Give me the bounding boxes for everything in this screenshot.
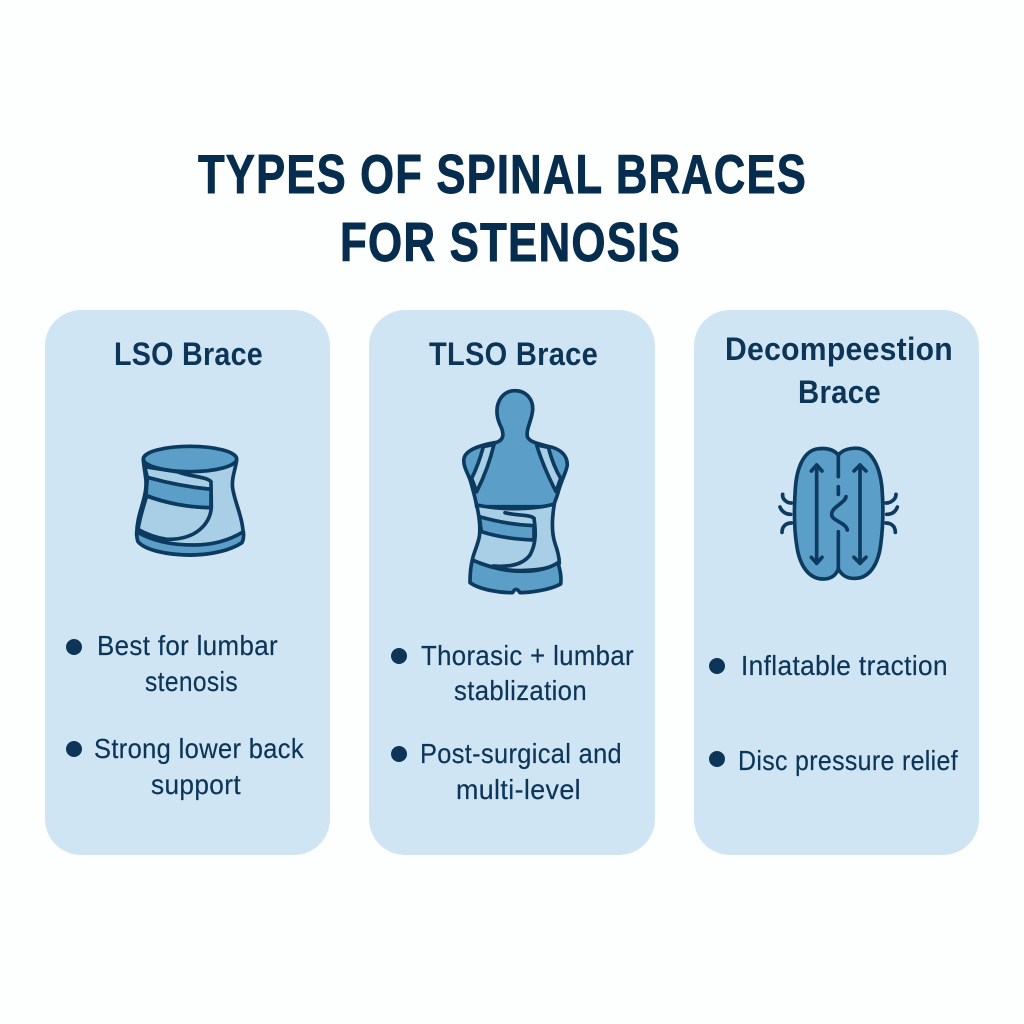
bullet list: LSO brace: support bbox=[151, 769, 241, 800]
panel: TLSO brace bbox=[369, 310, 655, 855]
bullet list: decompression brace: Inflatable traction bbox=[741, 650, 948, 681]
bullet list: LSO brace: Strong lower back bbox=[94, 733, 305, 764]
heading: TLSO brace: TLSO Brace bbox=[429, 336, 598, 372]
heading: decompression brace: Brace bbox=[798, 374, 881, 410]
heading: LSO brace: LSO Brace bbox=[114, 336, 263, 372]
bullet list: LSO brace: stenosis bbox=[145, 666, 238, 697]
heading: decompression brace: Decompeestion bbox=[725, 331, 953, 367]
icon: lumbar belt brace bbox=[137, 446, 244, 555]
heading: decompression brace bbox=[725, 331, 953, 410]
bullet list: decompression brace: Disc pressure relief bbox=[738, 745, 958, 776]
title bbox=[198, 143, 807, 273]
bullet list: TLSO brace: multi-level bbox=[456, 774, 581, 805]
bullet list: TLSO brace: Post-surgical and bbox=[420, 738, 622, 769]
panel: LSO brace bbox=[45, 310, 330, 855]
bullet list: LSO brace: Best for lumbar bbox=[97, 630, 278, 661]
bullet list: TLSO brace: stablization bbox=[454, 675, 587, 706]
icon: inflatable decompression brace bbox=[780, 448, 897, 579]
bullet list: TLSO brace: Thorasic + lumbar bbox=[421, 640, 634, 671]
bullet list: decompression brace bbox=[709, 650, 958, 776]
icon: thoracic lumbar brace on torso bbox=[464, 391, 567, 593]
panel: decompression brace bbox=[694, 310, 979, 855]
title: TYPES OF SPINAL BRACES bbox=[198, 143, 807, 205]
bullet list: TLSO brace bbox=[391, 640, 634, 805]
bullet list: LSO brace bbox=[66, 630, 305, 800]
title: FOR STENOSIS bbox=[340, 211, 681, 273]
